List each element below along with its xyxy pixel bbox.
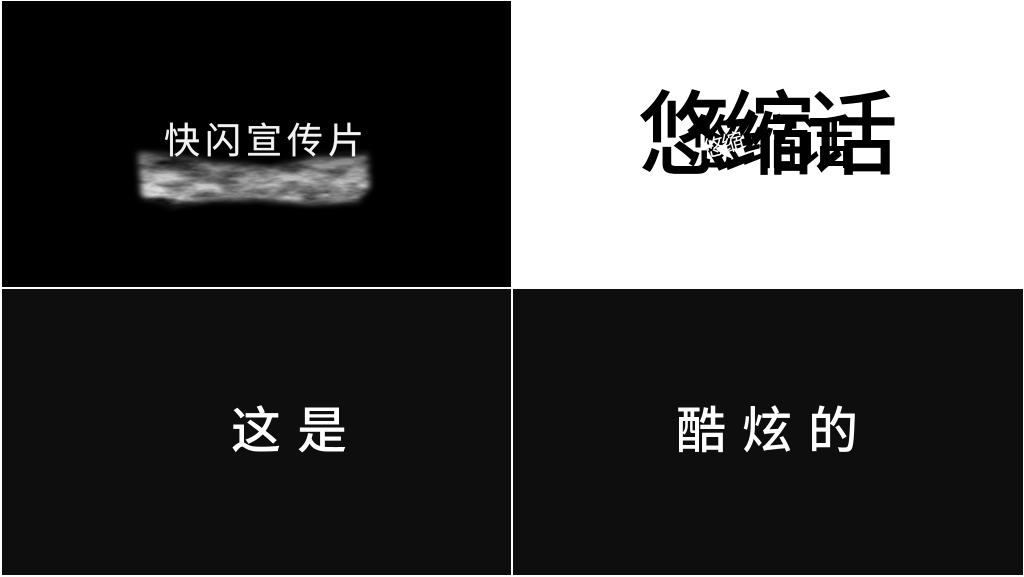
panel: smoke title slide [2,1,511,287]
panel: slide cool [513,289,1023,575]
tiny white overlapping text: 悠缩 [700,129,743,163]
text: ku xuan de: 酷炫的 [676,403,874,459]
panel: slide this is [2,289,511,575]
small overlapping headline: 悠缩话 [686,111,851,176]
smoke brush stroke [134,148,374,210]
slide title text: 快闪宣传片 [164,120,369,161]
large overlapping headline: 悠缩话 [638,85,890,187]
panel: overlapping text slide [513,1,1023,287]
text: zhe shi: 这是 [231,403,363,459]
